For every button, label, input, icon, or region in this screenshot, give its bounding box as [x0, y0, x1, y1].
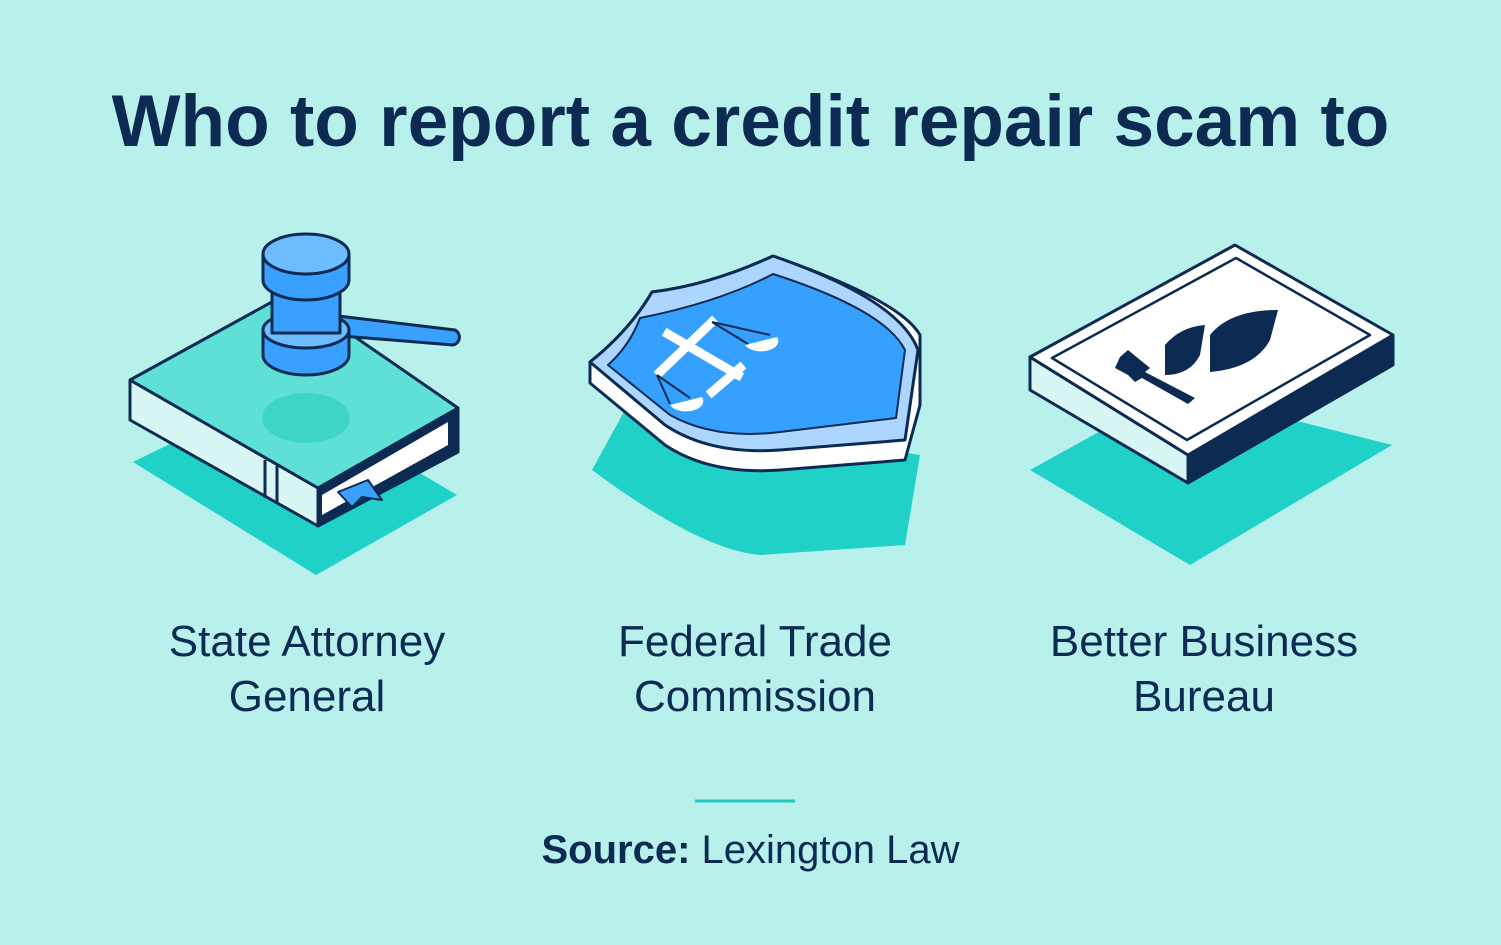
source: Source: Lexington Law	[541, 828, 960, 872]
label: State Attorney General	[169, 617, 446, 721]
label: State Attorney General: General	[229, 672, 385, 721]
title: Who to report a credit repair scam to	[112, 81, 1389, 162]
icon: gavel on book	[130, 234, 459, 575]
label: Better Business Bureau	[1050, 617, 1358, 721]
label: Better Business Bureau: Better Business	[1050, 617, 1358, 666]
icon: shield with scales	[590, 256, 920, 555]
label: Better Business Bureau: Bureau	[1133, 672, 1275, 721]
label: State Attorney General: State Attorney	[169, 617, 445, 666]
icon: BBB tablet	[1030, 245, 1393, 565]
label: Federal Trade Commission	[618, 617, 892, 721]
divider line	[695, 800, 795, 802]
label: Federal Trade Commission: Commission	[634, 672, 876, 721]
label: Federal Trade Commission: Federal Trade	[618, 617, 892, 666]
